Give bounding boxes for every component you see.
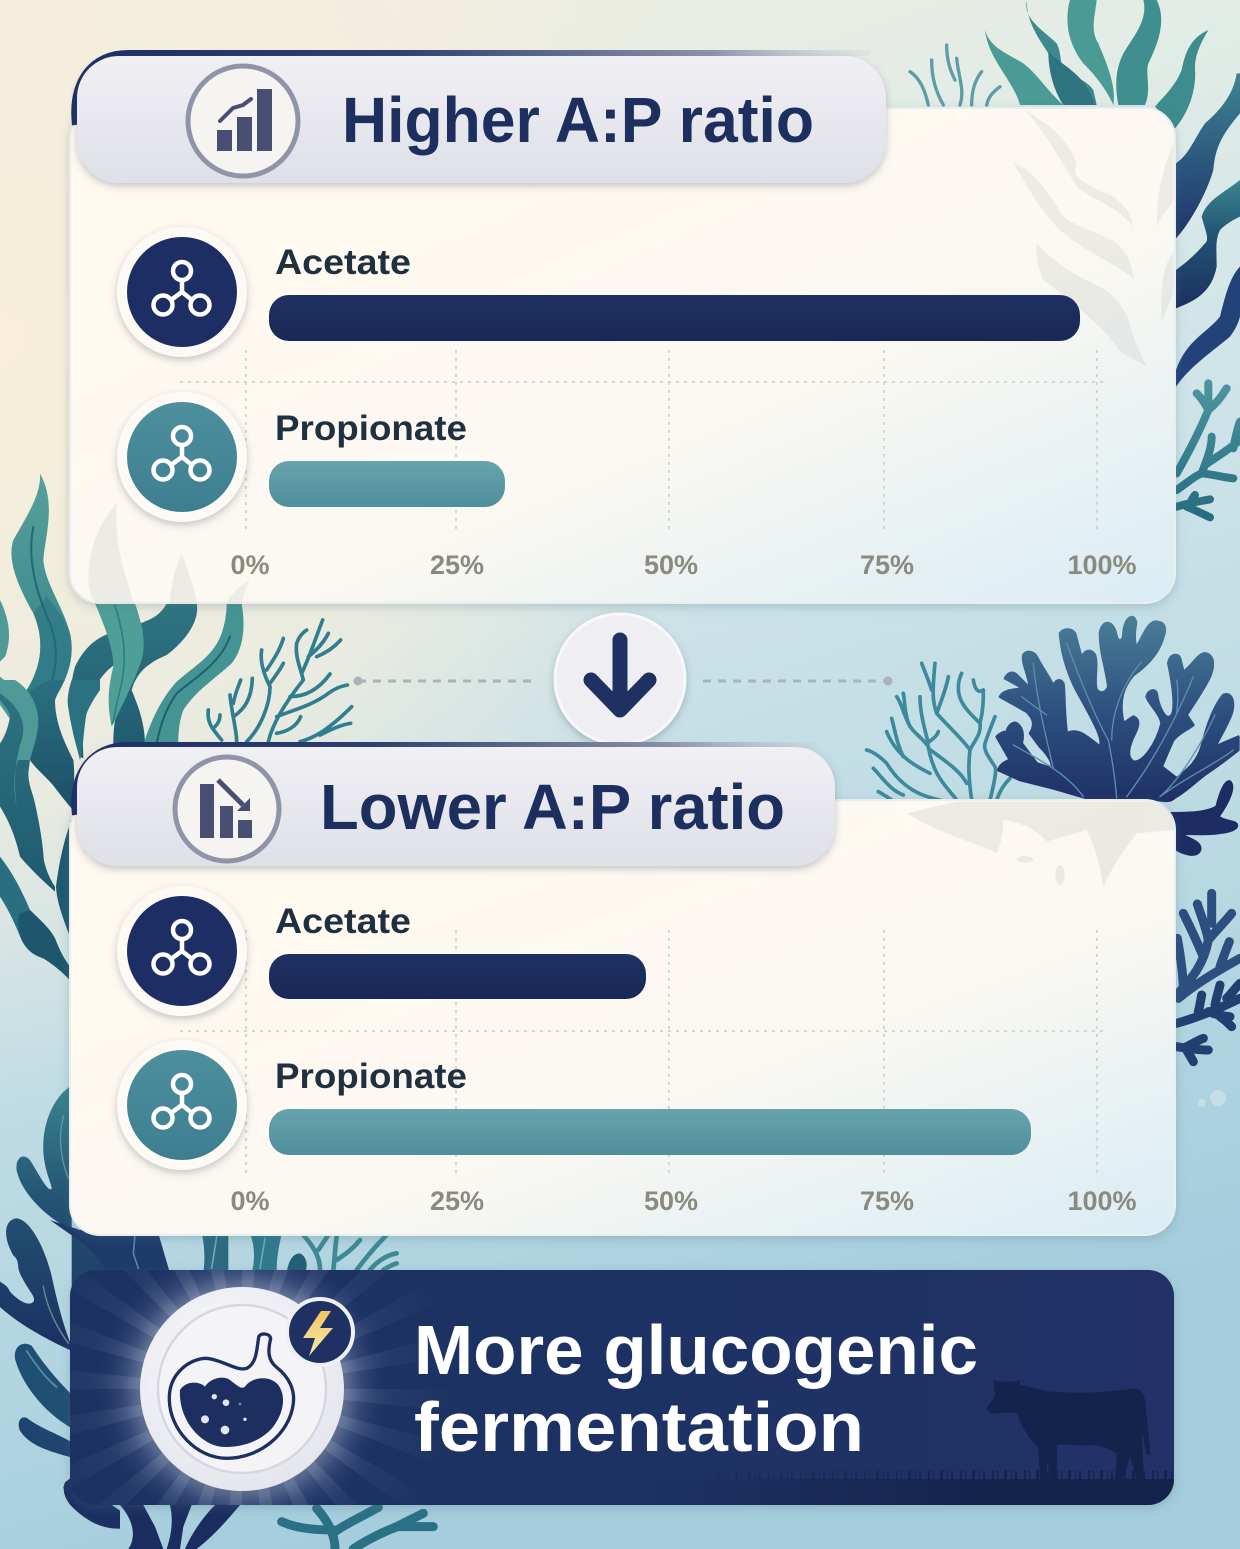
axis labels: 75% (860, 550, 914, 580)
icon: molecule (117, 886, 247, 1016)
axis labels: 75% (860, 1186, 914, 1216)
banner text: More glucogenic (414, 1311, 978, 1389)
banner art (84, 1270, 1174, 1505)
coral: right navy mid (1177, 893, 1240, 1062)
icon: falling bars (175, 757, 279, 861)
banner: more glucogenic fermentation (67, 1270, 1177, 1511)
axis labels: 25% (430, 1186, 484, 1216)
label: Acetate (275, 902, 411, 941)
axis labels: 50% (644, 1186, 698, 1216)
row: acetate (117, 886, 646, 1016)
axis labels: 25% (430, 550, 484, 580)
icon: rising bars (188, 66, 298, 176)
axis labels: 0% (230, 1186, 270, 1216)
arrow: down (555, 614, 685, 744)
row: propionate (117, 392, 505, 522)
row: acetate (117, 227, 1080, 357)
axis labels: 0% (230, 550, 270, 580)
coral: right teal under first panel (1177, 383, 1240, 517)
header pill (74, 745, 835, 866)
seaweed: below banner (63, 1480, 433, 1549)
icon: stomach (140, 1287, 344, 1491)
seaweed: left upper side (0, 680, 100, 980)
axis labels (230, 550, 1137, 580)
axis labels: 100% (1067, 550, 1137, 580)
card background (70, 108, 1175, 603)
coral: thin teal right (867, 663, 1010, 800)
light rays (84, 1270, 400, 1505)
banner background (70, 1270, 1174, 1505)
heading: Lower A:P ratio (320, 771, 785, 843)
rim (74, 53, 870, 125)
banner: more glucogenic fermentation: fermentation (414, 1388, 864, 1466)
pill (77, 747, 835, 866)
card background (70, 800, 1175, 1235)
label: Propionate (275, 409, 467, 448)
icon: molecule (117, 1040, 247, 1170)
label: Propionate (275, 1057, 467, 1096)
rim (74, 745, 820, 815)
icon: lightning badge (287, 1299, 353, 1365)
bar (269, 461, 505, 507)
icon: cow (987, 1380, 1151, 1479)
axis labels (230, 1186, 1137, 1216)
connector: dashed lines (354, 676, 892, 686)
seaweed: above banner (50, 1220, 397, 1273)
row: propionate (117, 1040, 1031, 1170)
label: Acetate (275, 243, 411, 282)
pill (77, 56, 886, 183)
panel: lower A:P ratio (70, 745, 1175, 1235)
bar (269, 1109, 1031, 1155)
bar (269, 295, 1080, 341)
ghost coral (907, 802, 1174, 887)
panel: higher A:P ratio (70, 53, 1175, 603)
chart grid (180, 350, 1106, 530)
bar (269, 954, 646, 999)
header pill (74, 53, 886, 183)
icon: molecule (117, 392, 247, 522)
coral: big navy coral (997, 617, 1238, 855)
seaweed: left kelp (0, 473, 352, 760)
ghost seaweed (88, 110, 1173, 603)
chart grid (180, 930, 1106, 1175)
axis labels: 50% (644, 550, 698, 580)
seaweed: lower left (0, 1085, 120, 1529)
axis labels: 100% (1067, 1186, 1137, 1216)
seaweed: top right (910, 0, 1240, 387)
icon: molecule (117, 227, 247, 357)
heading: Higher A:P ratio (342, 84, 814, 156)
grass (705, 1470, 1174, 1505)
bubbles (1198, 1090, 1226, 1107)
